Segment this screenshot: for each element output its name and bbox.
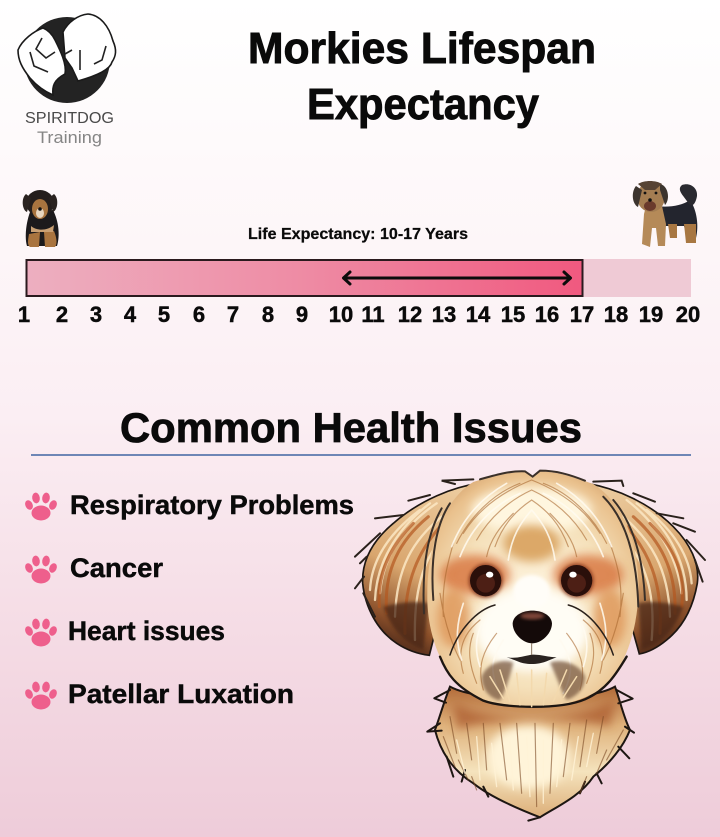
year axis numbers: 17 <box>570 302 594 327</box>
muzzle <box>475 588 588 672</box>
year axis numbers: 4 <box>124 302 137 327</box>
year axis numbers: 12 <box>398 302 422 327</box>
face <box>427 471 638 708</box>
item: patellar luxation: Patellar Luxation <box>68 679 294 709</box>
nose <box>513 611 552 643</box>
year axis numbers: 19 <box>639 302 663 327</box>
eye patches <box>440 555 510 595</box>
item: heart issues: Heart issues <box>68 616 225 646</box>
year axis numbers: 8 <box>262 302 274 327</box>
year axis numbers: 3 <box>90 302 102 327</box>
year axis numbers: 13 <box>432 302 456 327</box>
item: respiratory problems: Respiratory Problems <box>70 490 354 520</box>
title <box>248 24 596 129</box>
year axis numbers: 16 <box>535 302 559 327</box>
icon: adult dog <box>633 181 697 247</box>
face fur strands <box>440 480 623 690</box>
icon: puppy <box>23 190 59 247</box>
chest fur strands <box>443 717 623 807</box>
label: life expectancy: Life Expectancy: 10-17 Years <box>248 226 468 243</box>
face lower outline <box>440 657 627 707</box>
life expectancy bar <box>26 260 582 296</box>
mouth <box>507 655 557 664</box>
illustration: dog head <box>355 471 705 821</box>
year axis numbers: 5 <box>158 302 170 327</box>
chest fur <box>427 687 634 821</box>
title: Morkies Lifespan <box>248 24 596 73</box>
year axis numbers: 2 <box>56 302 68 327</box>
year axis numbers: 15 <box>501 302 525 327</box>
arrow: 10 to 17 years <box>344 272 570 284</box>
jowls <box>482 661 513 701</box>
year axis numbers <box>18 302 700 327</box>
eyes <box>468 563 594 598</box>
title: Expectancy <box>307 80 540 129</box>
forehead highlight <box>472 487 592 533</box>
year axis numbers: 7 <box>227 302 239 327</box>
muzzle lines <box>450 605 613 655</box>
heading: common health issues: Common Health Issues <box>120 404 582 451</box>
year axis numbers: 18 <box>604 302 628 327</box>
left ear <box>355 479 480 655</box>
year axis numbers: 6 <box>193 302 205 327</box>
year axis numbers: 14 <box>466 302 491 327</box>
logo subtitle: Training <box>37 129 102 147</box>
year axis numbers: 10 <box>329 302 353 327</box>
icon: two dogs logo <box>18 14 116 103</box>
logo: SpiritDog Training <box>18 14 116 147</box>
year axis numbers: 1 <box>18 302 30 327</box>
remaining range <box>583 259 691 297</box>
health issues list <box>24 490 354 710</box>
item: cancer: Cancer <box>70 553 163 583</box>
lifespan timeline bar <box>26 259 691 297</box>
right ear <box>587 481 705 654</box>
year axis numbers: 20 <box>676 302 700 327</box>
year axis numbers: 9 <box>296 302 308 327</box>
year axis numbers: 11 <box>361 302 385 327</box>
logo wordmark: SPIRITDOG <box>25 110 114 127</box>
top of head outline strands <box>424 471 645 613</box>
item: cancer <box>24 553 163 584</box>
